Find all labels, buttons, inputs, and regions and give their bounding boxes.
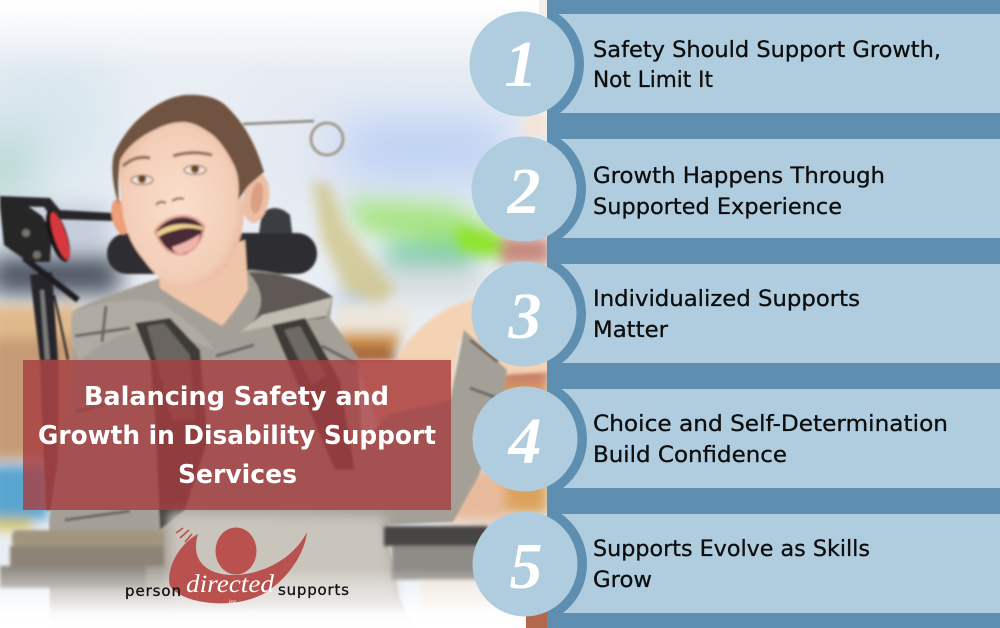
logo: person directed supports: supports bbox=[278, 581, 349, 599]
card 3 bar bbox=[547, 264, 1000, 363]
other person's arm bbox=[396, 298, 547, 396]
panel: list background bbox=[547, 0, 1000, 628]
card 4 bar bbox=[547, 389, 1000, 488]
card 2 bar bbox=[547, 139, 1000, 238]
text: item 3: Individualized Supports bbox=[593, 286, 860, 312]
step 5 badge: 5 bbox=[510, 530, 542, 603]
text: item 3 bbox=[593, 286, 860, 343]
logo: person directed supports: inc. bbox=[229, 600, 239, 606]
step 3 badge: 3 bbox=[508, 280, 542, 353]
text: item 4 bbox=[593, 411, 948, 468]
eyes bbox=[131, 176, 153, 184]
title: Services bbox=[178, 460, 297, 490]
step 2 badge: 2 bbox=[506, 155, 540, 228]
text: item 1 bbox=[593, 37, 941, 93]
logo: person directed supports bbox=[125, 528, 349, 606]
wheelchair headrest and frame bbox=[0, 196, 317, 510]
step 4 badge bbox=[472, 386, 578, 492]
step 3 badge bbox=[472, 262, 576, 366]
logo: person directed supports: directed bbox=[186, 571, 275, 598]
circle rings bbox=[547, 14, 587, 613]
text: item 2: Supported Experience bbox=[593, 194, 842, 220]
lower torso highlight bbox=[168, 512, 400, 600]
text: item 3: Matter bbox=[593, 317, 669, 343]
bottom fade bbox=[0, 568, 526, 628]
step 5 badge bbox=[472, 512, 578, 616]
step 1 badge: 1 bbox=[504, 28, 538, 101]
hoodie and torso bbox=[49, 270, 508, 628]
title: Balancing Safety and bbox=[84, 382, 389, 412]
photo: smiling boy in wheelchair bbox=[0, 0, 550, 628]
title bbox=[38, 382, 436, 490]
text: item 1: Not Limit It bbox=[593, 67, 713, 93]
step 4 badge: 4 bbox=[506, 405, 542, 478]
hair bbox=[112, 95, 264, 205]
neck bbox=[158, 240, 248, 326]
mouth bbox=[155, 216, 204, 255]
text: item 4: Choice and Self-Determination bbox=[593, 411, 948, 437]
text: item 2 bbox=[593, 163, 885, 220]
title: Growth in Disability Support bbox=[38, 421, 436, 451]
title banner bbox=[23, 360, 451, 510]
text: item 2: Growth Happens Through bbox=[593, 163, 885, 189]
logo: person directed supports: person bbox=[125, 582, 181, 600]
face bbox=[108, 95, 272, 288]
icon: IV pole ring bbox=[243, 121, 343, 155]
text: item 4: Build Confidence bbox=[593, 442, 787, 468]
wheelchair armrests bbox=[0, 526, 490, 610]
text: item 1: Safety Should Support Growth, bbox=[593, 37, 941, 63]
card 5 bar bbox=[547, 514, 1000, 613]
card 1 bar bbox=[547, 14, 1000, 113]
text: item 5: Grow bbox=[593, 567, 652, 593]
text: item 5: Supports Evolve as Skills bbox=[593, 536, 870, 562]
step 2 badge bbox=[472, 136, 576, 242]
nose bbox=[156, 198, 184, 205]
step 1 badge bbox=[470, 12, 574, 116]
text: item 5 bbox=[593, 536, 870, 593]
boy and wheelchair bbox=[0, 95, 508, 628]
